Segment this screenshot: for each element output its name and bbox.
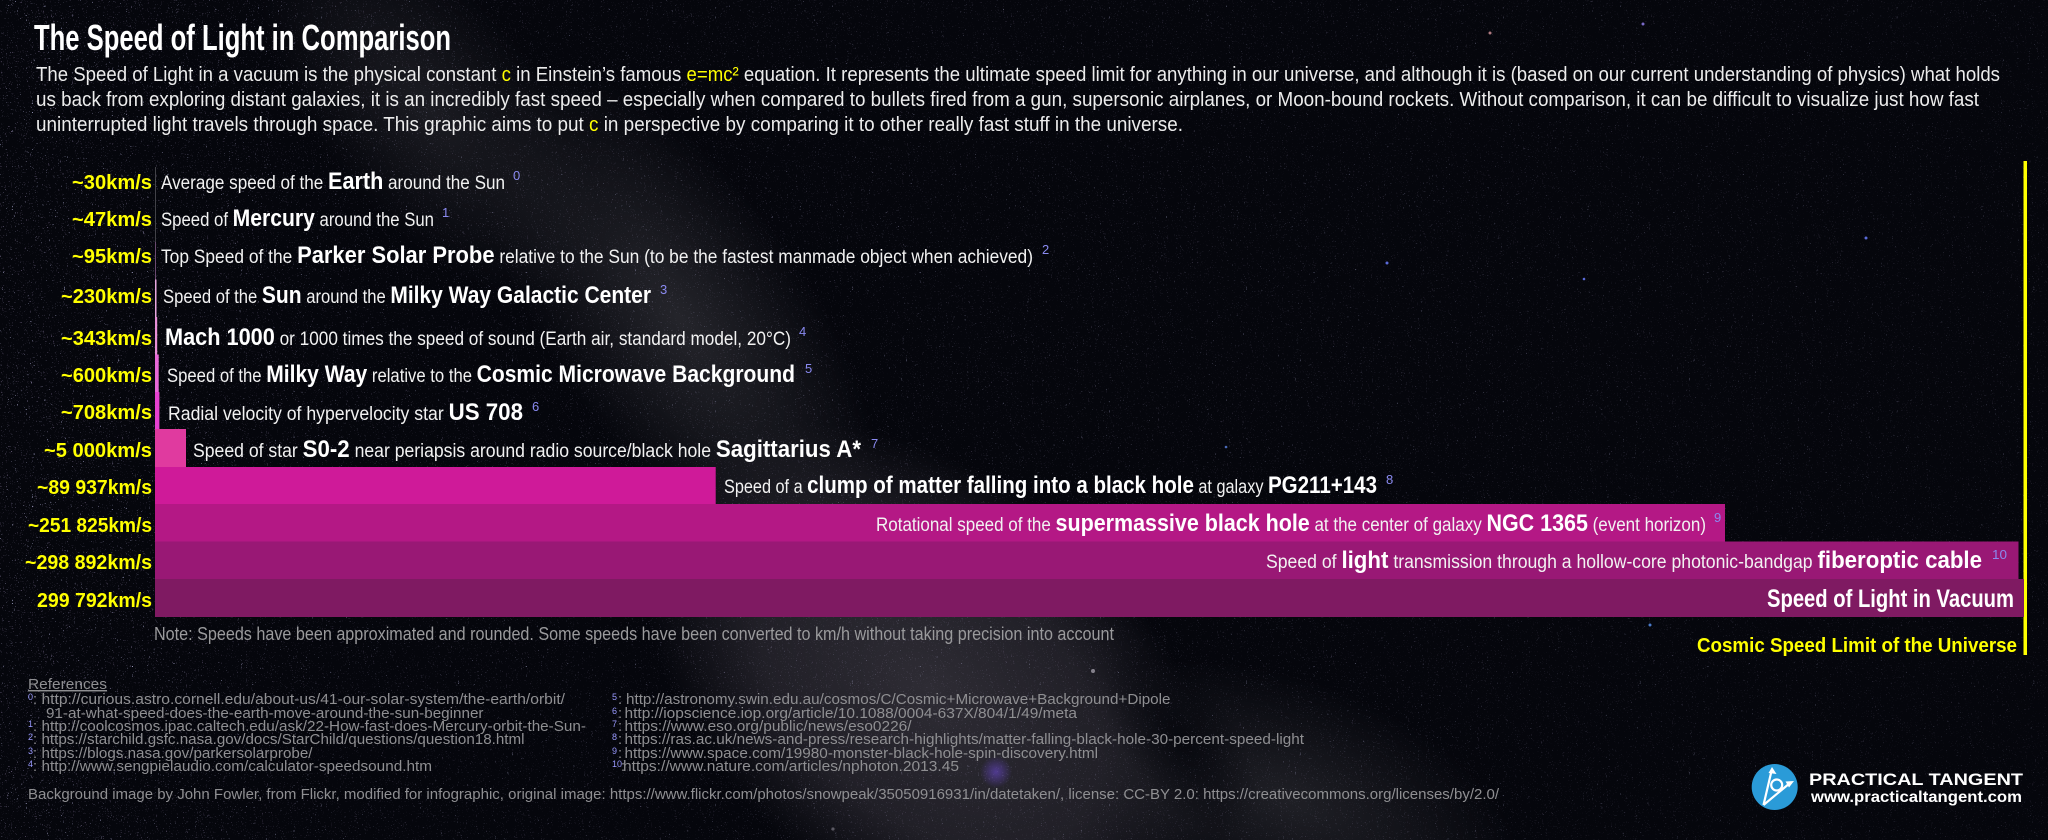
speed values: ~5 000km/s (44, 440, 152, 462)
references column 2 (612, 692, 1304, 775)
references column 1: : (33, 692, 37, 708)
label: Mach 1000: 4 (799, 324, 806, 339)
references column 2: 6 (612, 706, 617, 716)
speed values: ~47km/s (72, 209, 152, 231)
references column 1: 0 (28, 692, 33, 702)
intro paragraph: The Speed of Light in a vacuum is the physical constant c in Einstein’s famous e=mc² equation. It represents the ultimate speed limit for anything in our universe, and although it is (based on our current understanding of physics) what holds (36, 64, 2000, 86)
references column 1: https://starchild.gsfc.nasa.gov/docs/StarChild/questions/question18.html (42, 732, 524, 748)
references column 2: : (621, 759, 625, 775)
label: Parker Solar Probe: 2 (1042, 242, 1049, 257)
brand name: PRACTICAL TANGENT (1809, 770, 2024, 789)
references column 2: http://iopscience.iop.org/article/10.1088/0004-637X/804/1/49/meta (624, 706, 1078, 722)
speed limit line (2024, 161, 2027, 655)
references column 1: 2 (28, 732, 33, 742)
references column 1: : (33, 719, 37, 735)
references column 2: https://ras.ac.uk/news-and-press/research-highlights/matter-falling-black-hole-30-percent-speed-light (624, 732, 1304, 748)
speed values: ~343km/s (61, 328, 152, 350)
brand url: www.practicaltangent.com (1810, 789, 2022, 806)
label: Sun: Speed of the Sun around the Milky Way Galactic Center (163, 282, 651, 309)
label: US 708: Radial velocity of hypervelocity star US 708 (168, 399, 523, 426)
references column 1: http://www.sengpielaudio.com/calculator-speedsound.htm (42, 759, 432, 775)
speed values: 299 792km/s (37, 590, 152, 612)
speed values: ~298 892km/s (25, 552, 152, 574)
label: Earth: Average speed of the Earth around the Sun (161, 168, 505, 195)
speed values: ~230km/s (61, 286, 152, 308)
bar chart (155, 167, 2024, 617)
references column 2: https://www.nature.com/articles/nphoton.2013.45 (623, 759, 959, 775)
label: Parker Solar Probe: Top Speed of the Parker Solar Probe relative to the Sun (to be the fastest manmade object when achieved) (161, 242, 1033, 269)
references column 2: https://www.space.com/19980-monster-black-hole-spin-discovery.html (624, 746, 1098, 762)
label: NGC 1365: Rotational speed of the supermassive black hole at the center of galaxy NGC 1365 (event horizon) (876, 510, 1706, 537)
cosmic speed limit label: Cosmic Speed Limit of the Universe (1697, 635, 2017, 657)
speed values: ~95km/s (72, 246, 152, 268)
references column 2: 5 (612, 692, 617, 702)
references column 2: 9 (612, 746, 617, 756)
references column 1: 1 (28, 719, 33, 729)
label: S0-2: 7 (871, 436, 878, 451)
intro paragraph (36, 64, 2000, 136)
references column 2: : (618, 706, 622, 722)
references column 2: 10 (612, 759, 622, 769)
references column 2: https://www.eso.org/public/news/eso0226/ (624, 719, 913, 735)
row labels (161, 168, 2014, 613)
intro paragraph: uninterrupted light travels through space. This graphic aims to put c in perspective by comparing it to other really fast stuff in the universe. (36, 114, 1183, 136)
references column 1: 4 (28, 759, 33, 769)
speed values: ~30km/s (72, 172, 152, 194)
image credit: Background image by John Fowler, from Flickr, modified for infographic, original image: https://www.flickr.com/photos/snowpeak/35050916931/in/datetaken/, license: CC-BY 2.0: https://creativecommons.org/licenses/by/2.0/ (28, 787, 1500, 803)
references column 1: 91-at-what-speed-does-the-earth-move-around-the-sun-beginner (46, 706, 484, 722)
label: Milky Way: 5 (805, 361, 812, 376)
logo (1752, 764, 2024, 810)
label: Milky Way: Speed of the Milky Way relative to the Cosmic Microwave Background (167, 361, 795, 388)
label: US 708: 6 (532, 399, 539, 414)
references column 1: https://blogs.nasa.gov/parkersolarprobe/ (42, 746, 314, 762)
label: PG211+143: 8 (1386, 472, 1393, 487)
references column 2: 7 (612, 719, 617, 729)
references column 1: http://curious.astro.cornell.edu/about-us/41-our-solar-system/the-earth/orbit/ (42, 692, 566, 708)
label: S0-2: Speed of star S0-2 near periapsis around radio source/black hole Sagittarius A* (193, 436, 862, 463)
speed values (25, 172, 152, 612)
references column 2: http://astronomy.swin.edu.au/cosmos/C/Cosmic+Microwave+Background+Dipole (626, 692, 1170, 708)
references column 2: : (618, 732, 622, 748)
label: Earth: 0 (513, 168, 520, 183)
references column 2: : (618, 746, 622, 762)
references column 2: 8 (612, 732, 617, 742)
intro paragraph: us back from exploring distant galaxies, it is an incredibly fast speed – especially when compared to bullets fired from a gun, supersonic airplanes, or Moon-bound rockets. Without comparison, it can be difficult to visualize just how fast (36, 89, 1979, 111)
references heading: References (28, 677, 107, 693)
speed values: ~89 937km/s (37, 477, 152, 499)
references column 1: http://coolcosmos.ipac.caltech.edu/ask/22-How-fast-does-Mercury-orbit-the-Sun- (42, 719, 586, 735)
references column 1 (28, 692, 586, 775)
title: The Speed of Light in Comparison (34, 17, 451, 58)
label: Mercury: 1 (442, 205, 449, 220)
icon: compass in blue circle (1752, 764, 1798, 810)
references column 1: : (33, 746, 37, 762)
label: NGC 1365: 9 (1714, 510, 1721, 525)
references column 1: : (33, 732, 37, 748)
references column 1: 3 (28, 746, 33, 756)
references column 2: : (618, 719, 622, 735)
label: PG211+143: Speed of a clump of matter falling into a black hole at galaxy PG211+143 (724, 472, 1377, 499)
note: Note: Speeds have been approximated and rounded. Some speeds have been converted to km/h without taking precision into account (154, 624, 1114, 644)
label: fiberoptic cable: Speed of light transmission through a hollow-core photonic-bandgap fiberoptic cable (1266, 547, 1982, 574)
label: Sun: 3 (660, 282, 667, 297)
label: Mach 1000: Mach 1000 or 1000 times the speed of sound (Earth air, standard model, 20°C) (165, 324, 791, 351)
references column 1: : (33, 759, 37, 775)
speed values: ~251 825km/s (28, 515, 152, 537)
references column 2: : (618, 692, 622, 708)
label: Mercury: Speed of Mercury around the Sun (161, 205, 434, 232)
label: fiberoptic cable: 10 (1992, 547, 2007, 562)
speed values: ~708km/s (61, 402, 152, 424)
speed values: ~600km/s (61, 365, 152, 387)
